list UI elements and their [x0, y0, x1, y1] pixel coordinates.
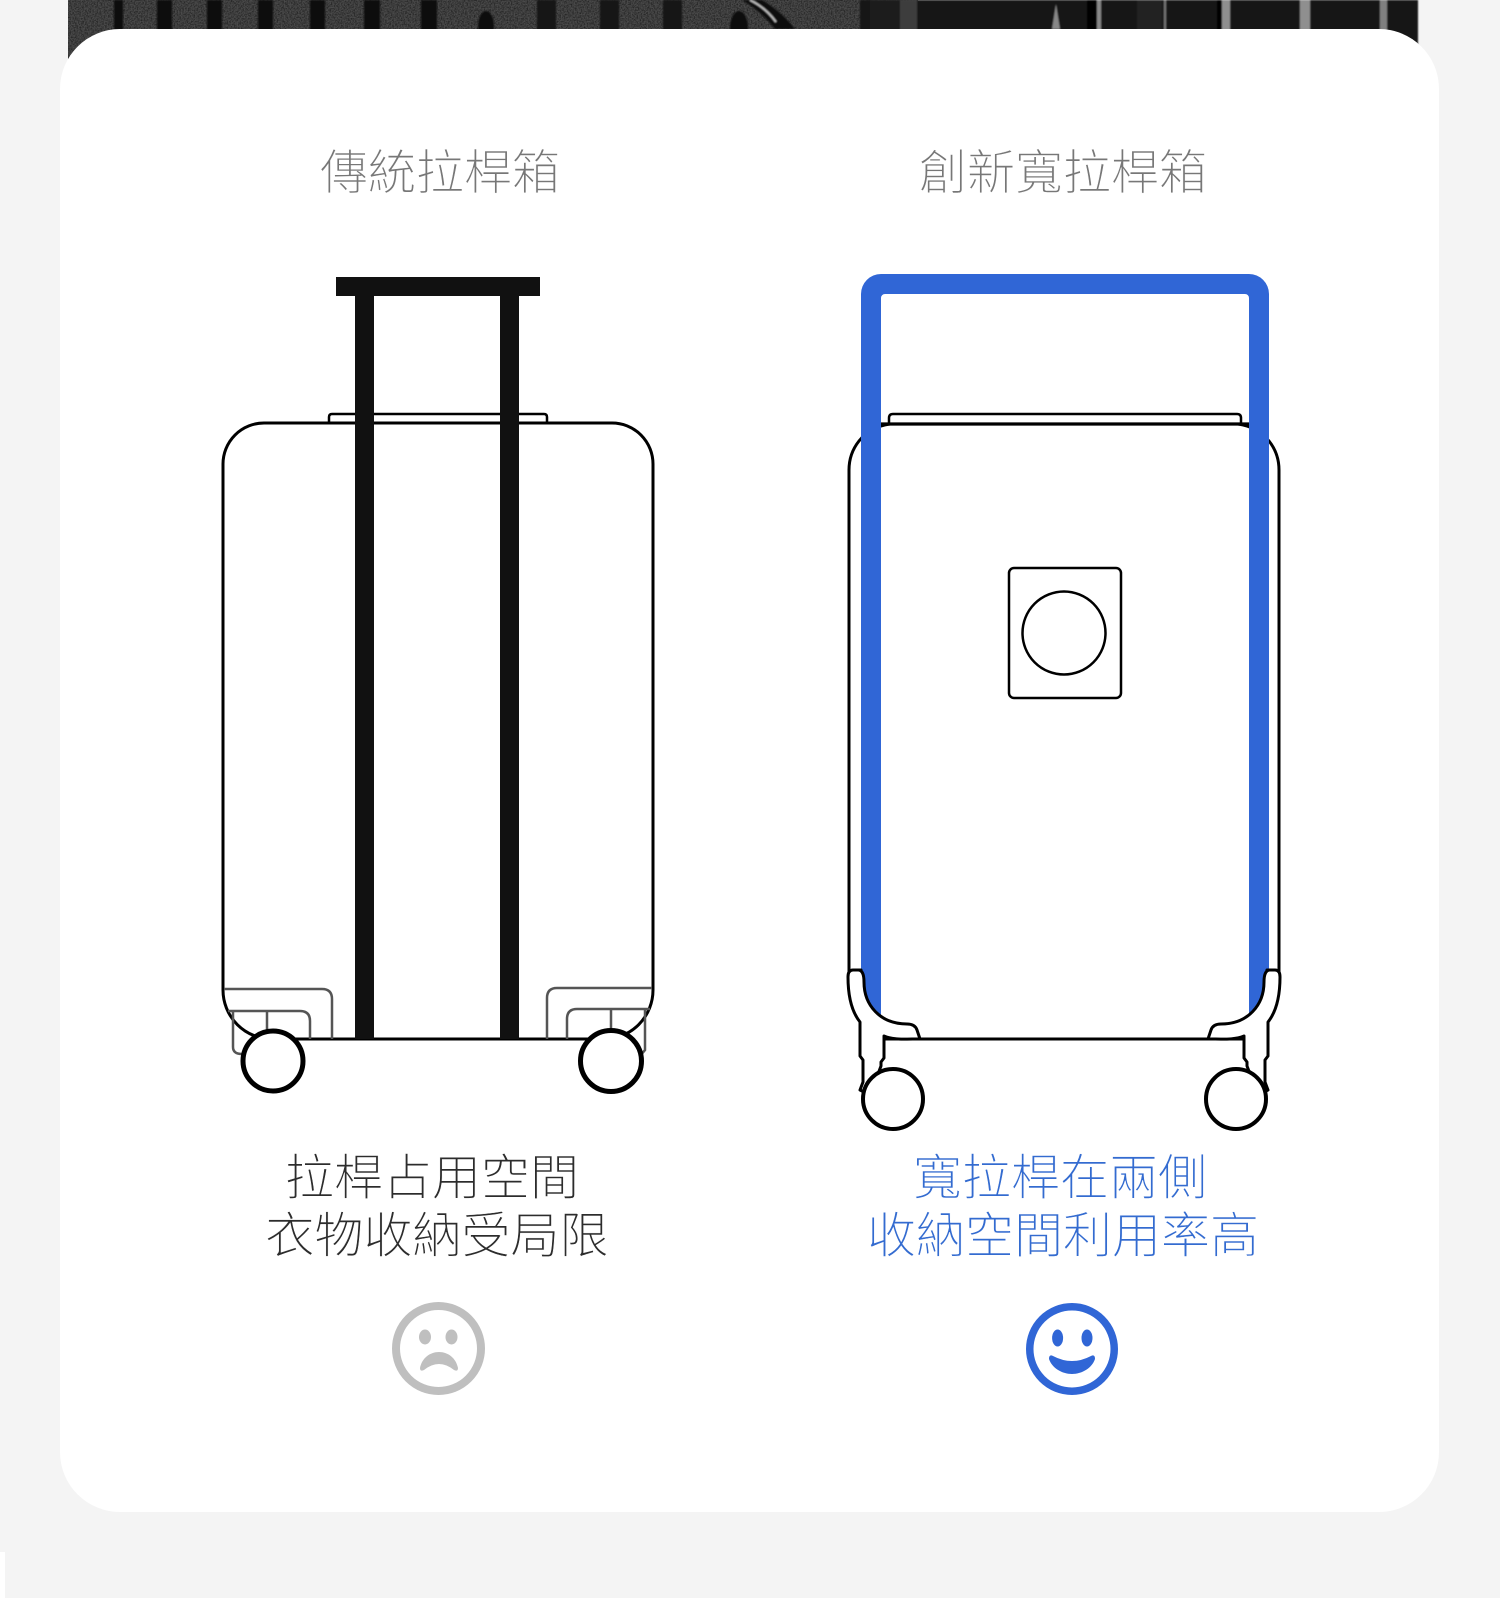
lock plate: [1009, 568, 1121, 698]
heading: traditional luggage: 傳統拉桿箱: [320, 147, 560, 200]
caption: wide-handle benefit: 收納空間利用率高: [867, 1210, 1259, 1264]
suitcase body: [223, 423, 653, 1039]
icon: happy face: [1030, 1307, 1114, 1391]
left wheel bracket: [848, 970, 920, 1095]
base line: [884, 1038, 1244, 1040]
caption: traditional drawback: [265, 1152, 609, 1264]
caption: wide-handle benefit: [867, 1152, 1259, 1264]
heading: innovative wide-handle luggage: 創新寬拉桿箱: [919, 147, 1207, 200]
corner guards: [224, 988, 652, 1056]
blue wide handle: [861, 274, 1269, 1020]
top cap: [889, 414, 1241, 424]
caption: wide-handle benefit: 寬拉桿在兩側: [913, 1152, 1207, 1206]
wide-handle luggage diagram: [848, 274, 1280, 1129]
outer shell: [849, 424, 1279, 1039]
wheels: [243, 1031, 303, 1091]
caption: traditional drawback: 衣物收納受局限: [265, 1210, 609, 1264]
right wheel bracket: [1208, 970, 1280, 1095]
caption: traditional drawback: 拉桿占用空間: [285, 1152, 579, 1206]
wheels: [863, 1069, 923, 1129]
suitcase photo strip behind card: [68, 0, 1418, 62]
top cap: [329, 414, 547, 423]
lock dial: [1022, 592, 1106, 674]
icon: sad face: [396, 1306, 481, 1391]
traditional luggage diagram: [223, 277, 653, 1092]
telescopic handle: [336, 277, 540, 1039]
